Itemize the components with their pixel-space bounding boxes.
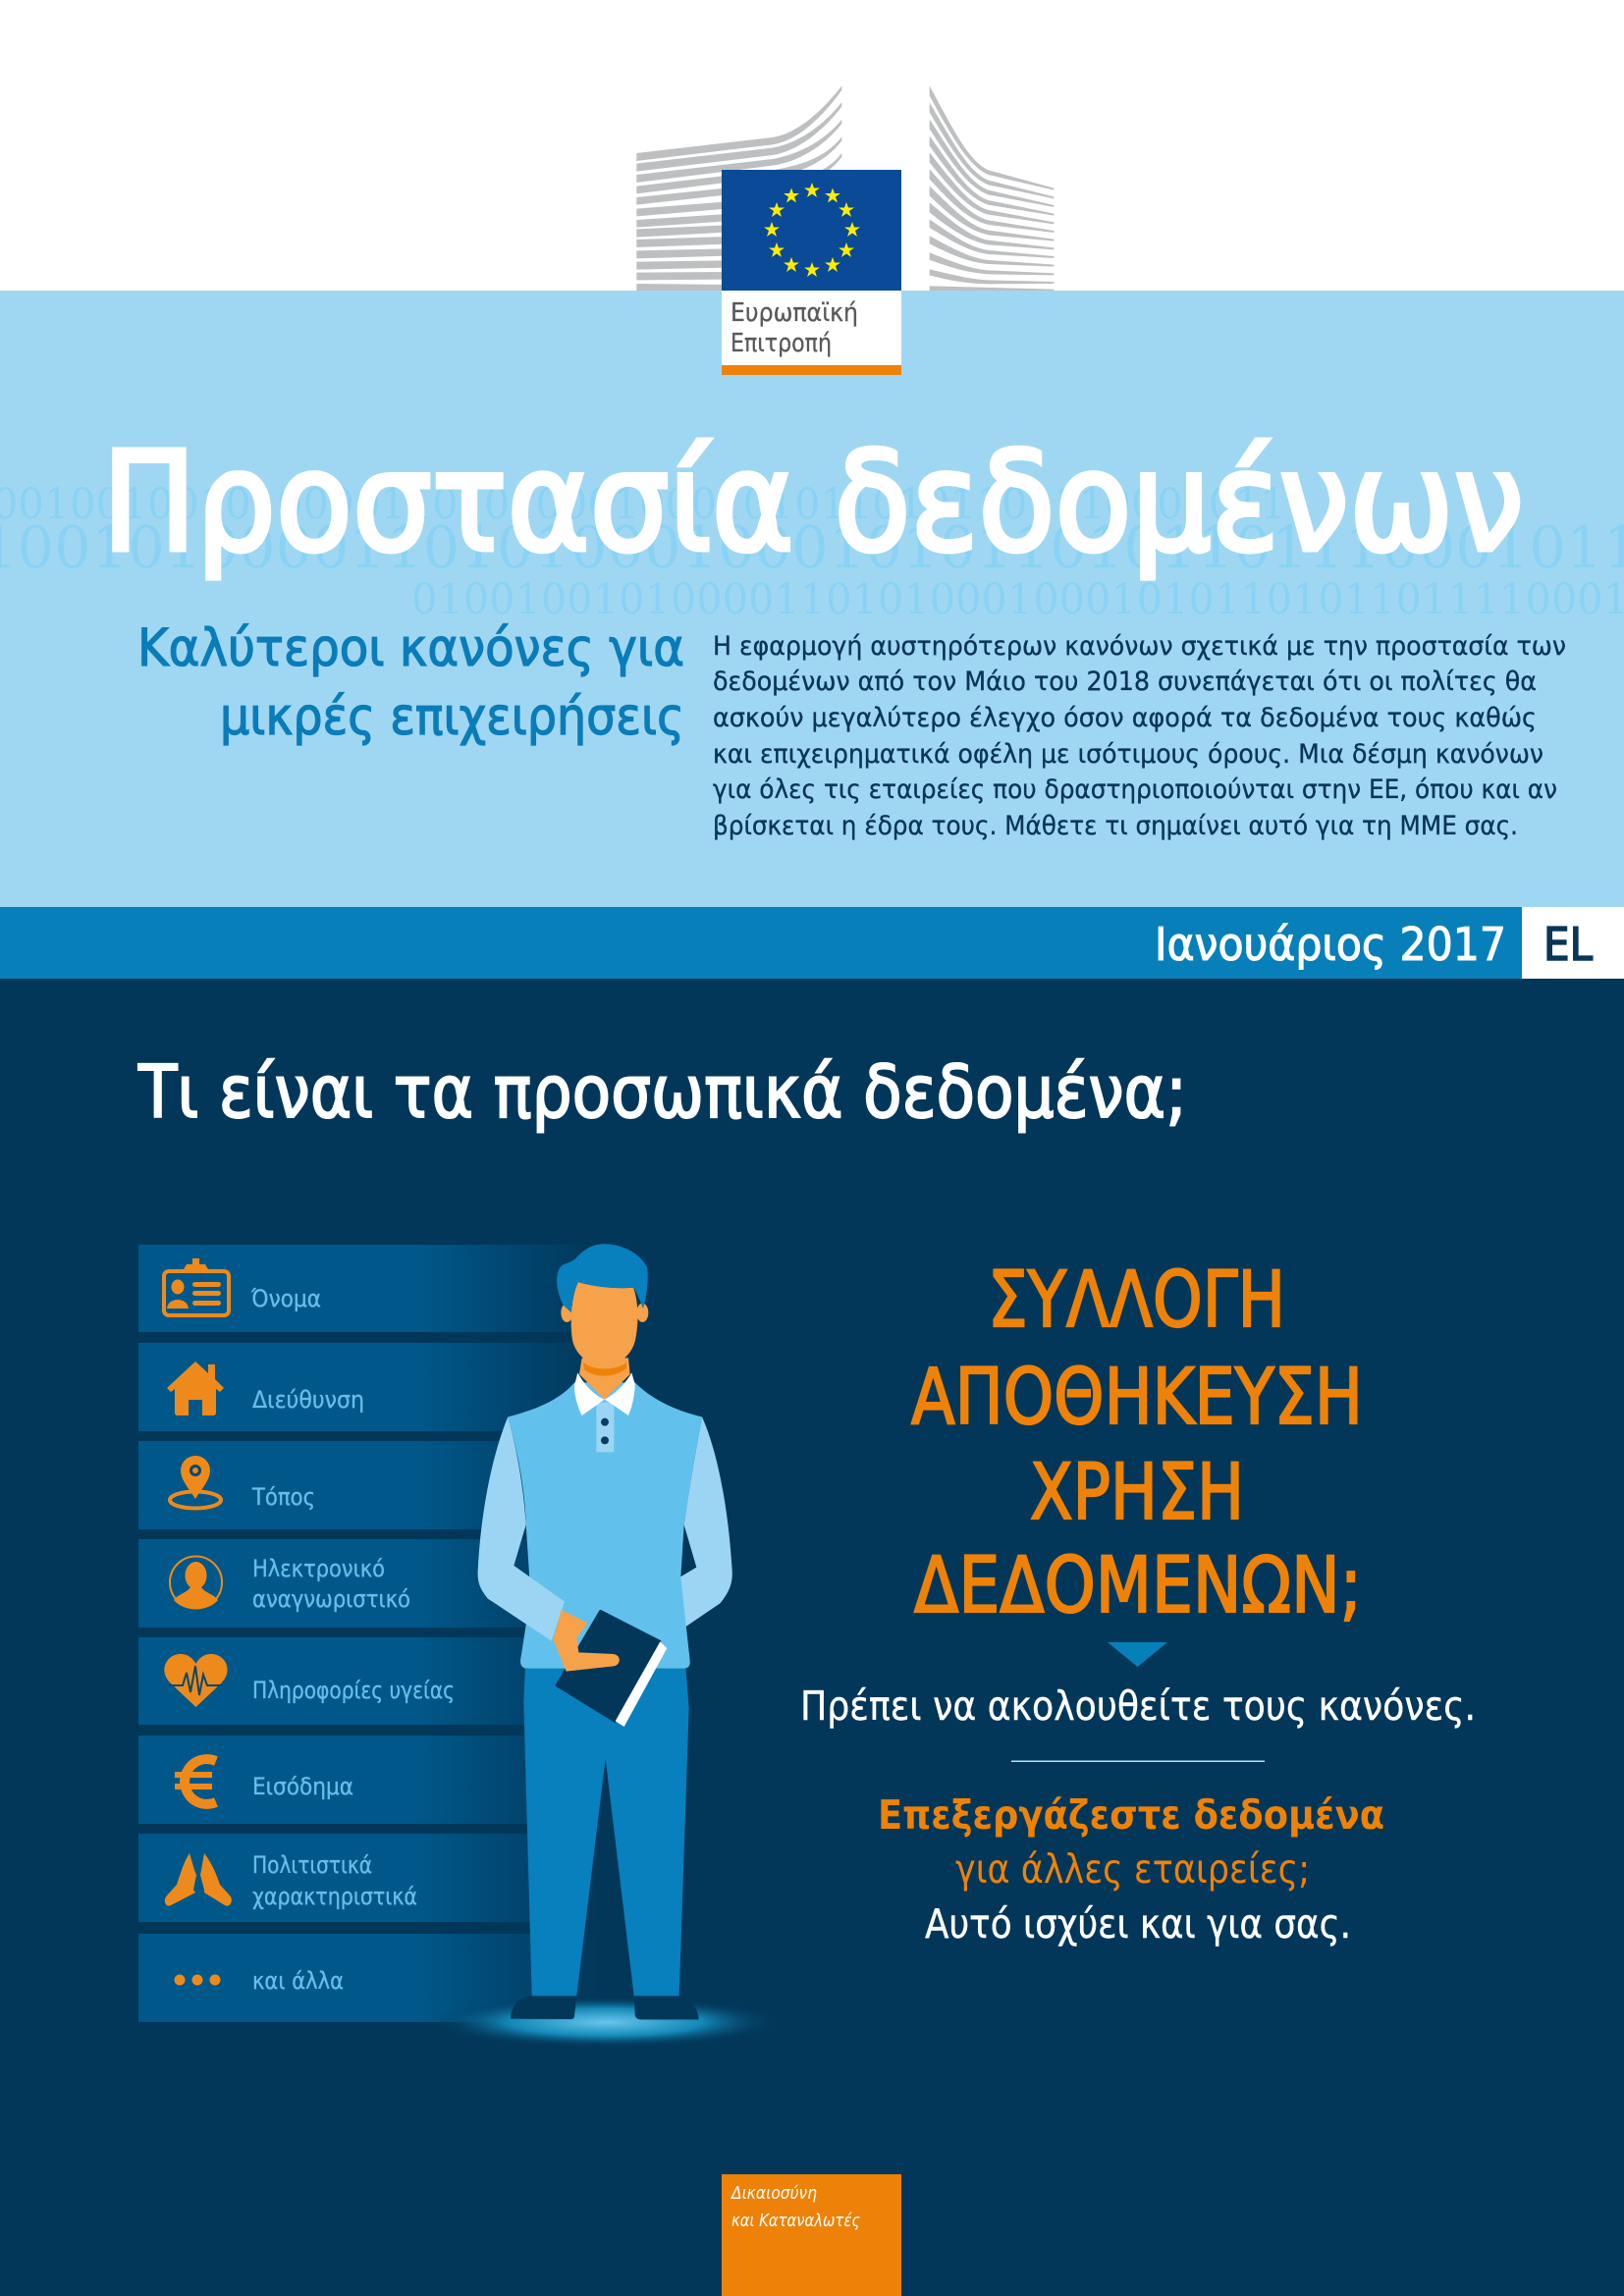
- icon: Berlaymont building wings: [636, 85, 1054, 292]
- right column: collection storage use: ΔΕΔΟΜΕΝΩΝ;: [914, 1542, 1362, 1630]
- placket: [596, 1402, 614, 1452]
- text: you must follow the rules: Πρέπει να ακολουθείτε τους κανόνες.: [800, 1682, 1476, 1730]
- footer tab: Justice and Consumers: Δικαιοσύνη: [730, 2183, 817, 2204]
- date band: EL: [1543, 918, 1593, 971]
- subtitle: [137, 618, 684, 747]
- arrow: down triangle: [1108, 1642, 1167, 1667]
- icon: euro: [175, 1759, 216, 1804]
- row: income: [138, 1735, 600, 1824]
- right column: collection storage use: [911, 1256, 1363, 1630]
- icon: id badge: [164, 1258, 229, 1315]
- intro paragraph: δεδομένων από τον Μάιο του 2018 συνεπάγεται ότι οι πολίτες θα: [713, 667, 1537, 697]
- logo: European Commission: [722, 170, 901, 375]
- shoes: [511, 1996, 699, 2019]
- trousers: [523, 1667, 689, 1996]
- icon: house: [167, 1362, 224, 1415]
- row: cultural characteristics: Πολιτιστικά: [252, 1851, 372, 1879]
- icon: EU stars: [764, 183, 860, 277]
- buttons: [601, 1418, 609, 1444]
- title: Προστασία δεδομένων: [102, 423, 1524, 583]
- row: health information: [138, 1637, 600, 1725]
- logo: European Commission: Ευρωπαϊκή: [731, 298, 858, 328]
- intro paragraph: βρίσκεται η έδρα τους. Μάθετε τι σημαίνει αυτό για τη ΜΜΕ σας.: [713, 811, 1518, 841]
- figure: man holding a book: [478, 1244, 732, 2019]
- logo: European Commission: Επιτροπή: [731, 329, 832, 358]
- row: health information: Πληροφορίες υγείας: [252, 1677, 455, 1704]
- row: address: Διεύθυνση: [252, 1386, 364, 1414]
- icon: praying hands: [165, 1853, 232, 1906]
- hand: [553, 1610, 620, 1672]
- vest: [508, 1382, 702, 1669]
- neck shadow: [583, 1362, 626, 1376]
- background binary digits: 100101000011010100010001010110101101110001011: [0, 513, 1624, 581]
- row: address: [138, 1343, 600, 1431]
- intro paragraph: για όλες τις εταιρείες που δραστηριοποιούνται στην ΕΕ, όπου και αν: [713, 774, 1557, 805]
- background binary digits: [0, 480, 1624, 624]
- right column: collection storage use: ΧΡΗΣΗ: [1030, 1449, 1244, 1537]
- text: processing for other companies: Επεξεργάζεστε δεδομένα: [878, 1791, 1384, 1839]
- divider: [1011, 1761, 1265, 1762]
- row: cultural characteristics: [138, 1834, 600, 1922]
- date band: [0, 907, 1624, 979]
- footer tab: Justice and Consumers: και Καταναλωτές: [731, 2211, 860, 2231]
- face: [571, 1282, 637, 1366]
- row: name: Όνομα: [250, 1285, 321, 1312]
- row: and more: και άλλα: [252, 1967, 344, 1995]
- text: processing for other companies: για άλλες εταιρείες;: [955, 1845, 1310, 1893]
- date band: Ιανουάριος 2017: [1155, 918, 1506, 971]
- panel: personal data rows: [138, 1245, 600, 2022]
- ears: [561, 1304, 572, 1322]
- intro paragraph: ασκούν μεγαλύτερο έλεγχο όσον αφορά τα δεδομένα τους καθώς: [713, 703, 1537, 733]
- dark section background: [0, 979, 1624, 2296]
- icon: heart with pulse: [164, 1654, 228, 1707]
- collar: [574, 1372, 635, 1415]
- icon: map pin: [170, 1456, 221, 1508]
- sleeves: [478, 1416, 565, 1641]
- left forearm over vest: [484, 1566, 565, 1641]
- right column: collection storage use: ΣΥΛΛΟΓΗ: [988, 1256, 1285, 1345]
- row: online identifier: Ηλεκτρονικό: [252, 1555, 385, 1582]
- row: and more: [138, 1934, 600, 2022]
- background binary digits: 00100100101000011010100010001010110101101110001011: [0, 480, 1286, 529]
- row: cultural characteristics: χαρακτηριστικά: [252, 1883, 417, 1910]
- intro paragraph: [713, 631, 1566, 841]
- spotlight glow under figure: [431, 1997, 781, 2048]
- intro paragraph: και επιχειρηματικά οφέλη με ισότιμους όρους. Μια δέσμη κανόνων: [713, 739, 1543, 770]
- text: processing for other companies: Αυτό ισχύει και για σας.: [925, 1900, 1351, 1948]
- book: [557, 1612, 660, 1721]
- footer tab: Justice and Consumers: [722, 2174, 901, 2296]
- row: online identifier: [138, 1539, 600, 1628]
- icon: person in circle: [170, 1557, 222, 1609]
- subtitle: μικρές επιχειρήσεις: [220, 687, 684, 747]
- icon: three dots: [175, 1975, 220, 1985]
- section heading: Τι είναι τα προσωπικά δεδομένα;: [137, 1050, 1187, 1135]
- white header background: [0, 0, 1624, 294]
- row: name: [138, 1245, 600, 1332]
- subtitle: Καλύτεροι κανόνες για: [137, 618, 684, 678]
- intro paragraph: Η εφαρμογή αυστηρότερων κανόνων σχετικά με την προστασία των: [713, 631, 1566, 662]
- row: location: [138, 1441, 600, 1529]
- right column: collection storage use: ΑΠΟΘΗΚΕΥΣΗ: [911, 1354, 1363, 1442]
- row: income: Εισόδημα: [252, 1773, 353, 1800]
- text: processing for other companies: [878, 1791, 1384, 1948]
- hair: [557, 1244, 648, 1312]
- book spine: [616, 1641, 667, 1727]
- row: online identifier: αναγνωριστικό: [252, 1585, 410, 1613]
- light blue header band: [0, 291, 1624, 907]
- neck: [579, 1358, 630, 1400]
- row: location: Τόπος: [251, 1483, 315, 1511]
